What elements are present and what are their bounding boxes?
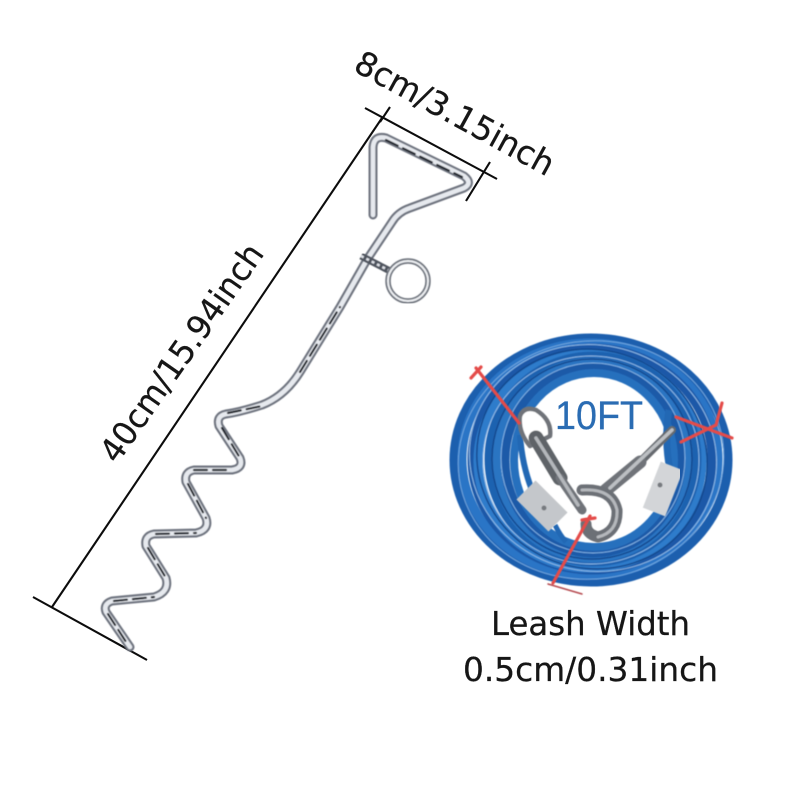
icon: swivel ring [361,256,428,301]
label: stake length: 40cm/15.94inch [92,236,272,470]
label: leash width [463,604,718,689]
icon: red cable ties [471,367,732,594]
dimension lines for the stake [33,107,497,660]
label: leash width: 0.5cm/0.31inch [463,650,718,689]
label: cable length: 10FT [555,394,643,438]
stake body outline [105,137,468,647]
stake dark reflection [108,140,462,645]
label: leash width: Leash Width [491,604,690,643]
label: stake width: 8cm/3.15inch [348,43,562,184]
inner cable strands [520,435,532,490]
icon: cable snap hooks [520,409,672,537]
icon: spiral metal stake [105,137,468,647]
stake highlight [105,137,468,647]
icon: coiled blue cable [443,317,739,601]
